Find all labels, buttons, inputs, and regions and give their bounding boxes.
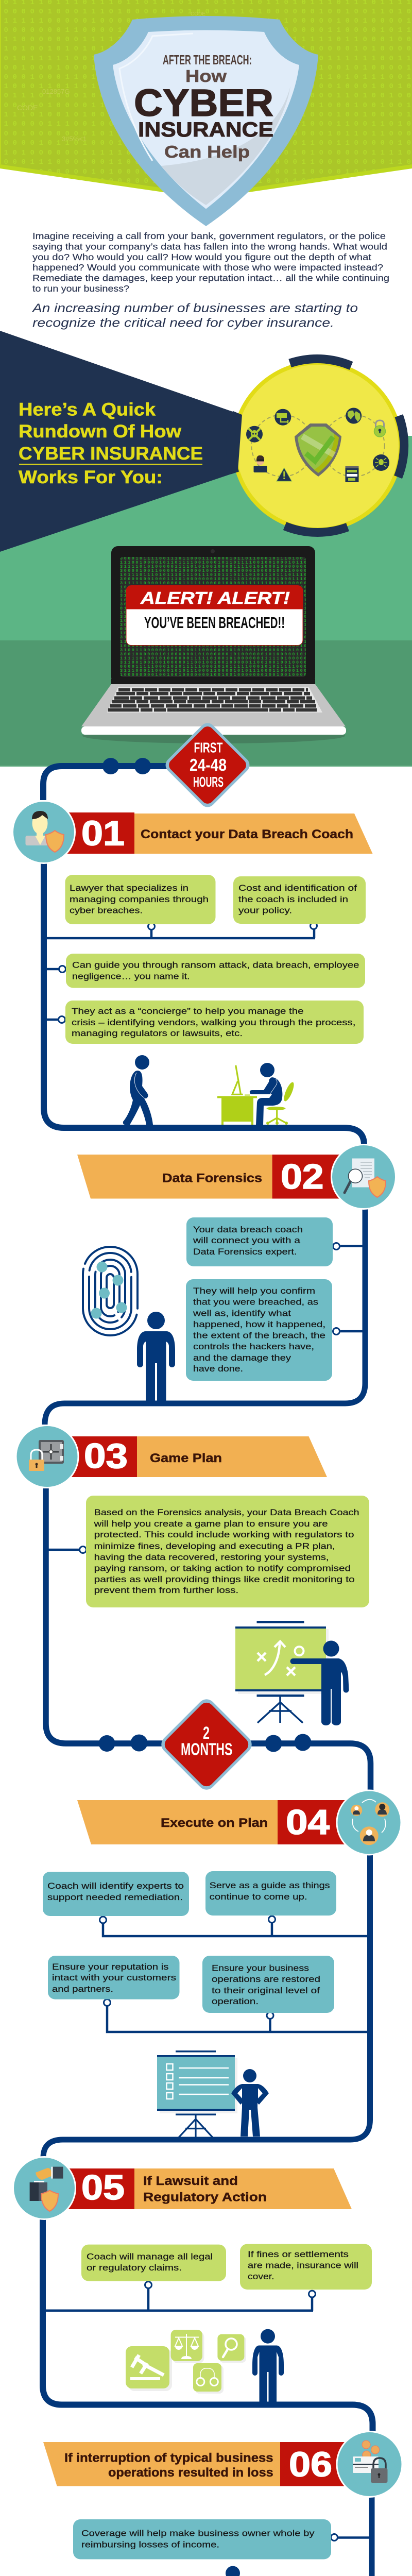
callout: game plan: will help you create a game plan to ensure you are (93, 1519, 328, 1529)
connector lines 03 (46, 1547, 87, 1553)
rundown heading: Works For You: (19, 467, 163, 487)
banner 01: 01 (81, 814, 125, 853)
callout: fines: cover. (248, 2272, 274, 2281)
timeline: step 03 path (46, 1488, 371, 1790)
italic statement (31, 301, 358, 330)
callout: experts: Coach will identify experts to (47, 1882, 184, 1891)
callout: game plan: minimize fines, developing and executing a PR plan, (94, 1541, 335, 1551)
icon: team cycle (336, 1790, 402, 1856)
timeline: step 05 path (43, 2218, 373, 2433)
section 04: execute on plan (43, 1790, 402, 2158)
header background: green binary field: 101001010101000001010010010010101010000010100000 (4, 45, 412, 53)
binary screen: 300100000010100000010100000010100000010100000101 (120, 652, 308, 657)
binary screen: 011010010110100101101001011010010110100101101001 (120, 606, 308, 611)
italic statement: An increasing number of businesses are starting to (31, 301, 358, 315)
header background: green binary field: 111010010100100010100100101001001010001001000010 (4, 111, 412, 119)
milestone connector dots: two months (99, 1734, 311, 1752)
binary screen: 310111001101011100110101110011010111001101011100 (120, 589, 308, 594)
binary screen: 300001001100000100000100110001000010000100110000 (120, 568, 308, 573)
callout: coverage: reimbursing losses of income. (81, 2539, 219, 2549)
connector lines 02 (333, 1243, 364, 1334)
badge: first 24-48 hours: 24-48 (190, 755, 227, 774)
icon: padlock (374, 420, 385, 437)
badge: 2 months (158, 1696, 255, 1793)
intro paragraph: saying that your company’s data has fallen into the wrong hands. What would (32, 241, 387, 251)
intro paragraph: Imagine receiving a call from your bank, government regulators, or the police (32, 231, 386, 241)
callout: guide: negligence… you name it. (72, 972, 190, 981)
banner 06: 06 (289, 2445, 332, 2484)
timeline: step 02 path (45, 1208, 365, 1425)
banner 04: 04 (286, 1803, 330, 1842)
section 01: data breach coach (12, 800, 373, 1125)
header background: green binary field: 010111110010111110100100011101111001011111100111 (4, 55, 412, 63)
callout: lawyer: managing companies through (70, 894, 209, 904)
header background: green binary field: 110000000111110110001000100000000111110110001001 (4, 36, 412, 44)
rundown heading: Here’s A Quick (19, 400, 156, 419)
icon tile: gavel (126, 2346, 172, 2391)
callout: reputation: intact with your customers (52, 1973, 176, 1982)
icon: card with padlock and coins (336, 2431, 403, 2498)
callout: confirm: happened, how it happened, (193, 1320, 325, 1329)
callout: reputation: and partners. (52, 1985, 113, 1994)
callout: confirm: the extent of the breach, the (193, 1331, 325, 1341)
badge: first 24-48 hours: FIRST (194, 740, 222, 755)
callout: game plan (86, 1496, 369, 1607)
callout: confirm: that you were breached, as (193, 1298, 318, 1307)
banner 06: operations resulted in loss (108, 2466, 273, 2480)
timeline: final path (174, 2497, 372, 2576)
binary screen: 300100010000100010000100010000100010000100010001 (120, 602, 308, 607)
header background: green binary field: CODE (17, 104, 38, 112)
binary screen: 111110100101000000111110100101000000111110100000 (120, 656, 308, 661)
callout: claims (81, 2245, 226, 2281)
laptop (81, 546, 346, 743)
banner 03: 03 (84, 1436, 128, 1476)
banner 02 (77, 1155, 342, 1198)
header background: green binary field: 012857G (42, 88, 70, 95)
binary screen: 011000110001100011000110001100011000110001100011 (120, 626, 308, 632)
binary screen: 310010010001001000100100010010001001000100100010 (120, 635, 308, 640)
banner 04: Execute on Plan (161, 1816, 268, 1830)
banner 03 (67, 1436, 327, 1477)
binary screen: 111001000010110111100100010110111100100100010110 (120, 560, 308, 565)
binary screen: 000011111000101011111000101011111000101011111000 (120, 664, 308, 669)
icon: ballot box and hand (12, 2156, 76, 2220)
callout: guide: Can guide you through ransom attack, data breach, employee (72, 960, 359, 970)
figure: person with checklist board (157, 2050, 269, 2140)
header background: green binary field: 101000000111110010010010001000000101000000111100 (4, 149, 412, 157)
icon: masked hacker (253, 455, 267, 472)
banner 01: Contact your Data Breach Coach (141, 827, 353, 841)
callout: experts: support needed remediation. (47, 1893, 183, 1902)
yellow threat circle (232, 361, 403, 532)
timeline: step 01 path (44, 863, 364, 1145)
callout: operations: operation. (212, 1997, 259, 2006)
callout: guide (66, 954, 365, 988)
title text: INSURANCE (138, 118, 273, 141)
title text: CYBER (134, 81, 273, 124)
icon: warning triangle (277, 468, 291, 481)
icon: security camera (274, 409, 291, 426)
badge: first 24-48 hours (162, 720, 253, 810)
callout: cost: the coach is included in (238, 894, 348, 904)
binary screen: 310001100100011001000110010001100100011001000110 (120, 614, 308, 619)
intro paragraph: you do? Who would you call? How would you figure out the depth of what (32, 252, 371, 262)
rundown heading: Rundown Of How (19, 421, 182, 442)
banner 05: 05 (81, 2168, 125, 2207)
callout: game plan: prevent them from further loss. (94, 1586, 238, 1595)
header background: green binary field: 111110000010000110100010111101111000001001000010 (4, 17, 412, 25)
header background: green binary field: 000010110100010100010110101000010011001100000100 (4, 139, 412, 147)
banner 05: If Lawsuit and (143, 2174, 238, 2188)
callout: fines: If fines or settlements (248, 2250, 349, 2259)
icon: globe (346, 408, 362, 423)
header background: green binary field: 000001000011000100010010010011000100100010010010 (4, 101, 412, 110)
badge: 2 months: MONTHS (181, 1740, 233, 1759)
alert dialog: ALERT! ALERT! (140, 588, 290, 607)
header background: green binary field: 3#5%<1 (62, 135, 87, 143)
binary screen: 311110101000001111010100100001111010100010000000 (120, 564, 308, 569)
callout: coverage (73, 2519, 331, 2560)
section 03: game plan (15, 1425, 371, 1790)
callout: game plan: Based on the Forensics analysis, your Data Breach Coach (94, 1508, 359, 1517)
section 02: data forensics (45, 1144, 397, 1425)
banner 03: Game Plan (150, 1451, 222, 1465)
callout: concierge (65, 1001, 364, 1044)
callout: operations: Ensure your business (212, 1964, 309, 1973)
figure: presenter at play board (235, 1621, 349, 1725)
italic statement: recognize the critical need for cyber insurance. (32, 316, 334, 330)
banner 06 (43, 2442, 347, 2486)
callout: confirm: and the damage they (193, 1353, 291, 1363)
icon tile: scales (171, 2330, 204, 2363)
alert dialog: YOU’VE BEEN BREACHED!! (144, 614, 285, 632)
callout: experts (43, 1872, 189, 1916)
callout: game plan: protected. This could include working with regulators to (94, 1530, 354, 1539)
header background: green binary field: 000100011010110101110010000100011010110101110011 (4, 73, 412, 81)
title text: AFTER THE BREACH: (163, 52, 252, 67)
rundown heading: CYBER INSURANCE (19, 444, 203, 464)
binary screen: 310011000000101010011000000101010011000000101011 (120, 648, 308, 653)
icon: document inspection (331, 1144, 397, 1210)
icon: coach with shield (12, 800, 76, 864)
binary screen: 100000100010000010001000001000100000100010000010 (120, 643, 308, 649)
title text: How (185, 66, 227, 86)
icon: skull and crossbones (246, 426, 263, 443)
binary screen: 110110111011011101101110110111011011101101110111 (120, 639, 308, 645)
callout: operations (202, 1956, 334, 2013)
callout: game plan: paying ransom, or taking action to notify compromised (94, 1564, 351, 1573)
callout: game plan: having the data recovered, restoring your systems, (94, 1553, 329, 1562)
callout: connect: will connect you with a (193, 1236, 301, 1245)
callout: operations: operations are restored (212, 1975, 320, 1984)
callout: fines: are made, insurance will (248, 2261, 358, 2270)
intro paragraph: happened? Would you communicate with those who were impacted instead? (32, 262, 383, 273)
header background: green binary field: CODE (191, 11, 205, 17)
connector line 06 (331, 2534, 372, 2541)
figure: walking person (123, 1055, 153, 1125)
figure: person at desk (217, 1063, 296, 1125)
title text (134, 52, 273, 161)
callout: cost: your policy. (238, 906, 292, 915)
callout: coverage: Coverage will help make business owner whole by (81, 2529, 315, 2538)
connector lines 01 (44, 922, 317, 1023)
heading panel: navy wedge (0, 331, 404, 552)
icon tile: magnifier (217, 2334, 246, 2363)
figure: standing person (137, 1312, 175, 1401)
callout: confirm: They will help you confirm (193, 1286, 315, 1296)
callout: confirm: have done. (193, 1364, 243, 1374)
header background: green binary field: 001000000010110010001000010110010000010110110001 (4, 130, 412, 138)
banner 02: 02 (281, 1157, 324, 1196)
binary screen: 300110011001100110011001100110011001100110011001 (120, 622, 308, 628)
icon: safe and padlock (15, 1425, 79, 1488)
banner 05: Regulatory Action (143, 2191, 267, 2204)
binary screen: 300000001000111010000000100011101000000010001110 (120, 577, 308, 582)
callout: fines (240, 2244, 372, 2290)
callout: confirm: controls the hackers have, (193, 1342, 314, 1351)
binary screen (120, 556, 308, 677)
binary screen: 311001001001000001100100100100000110010010010000 (120, 660, 308, 665)
title shield (94, 16, 318, 226)
header background: green binary field: 100001110010011010001110010100010110001100110101 (4, 120, 412, 128)
header background: green binary field: 010000000010100000000100100010000110000101000101 (4, 168, 412, 176)
banner 02: Data Forensics (162, 1171, 262, 1185)
callout: cost (233, 876, 366, 924)
binary screen: 100101001010010100101001010010100101001010010101 (120, 631, 308, 636)
header background: green binary field: 000100100010000001000100010001000100010010001000 (4, 177, 412, 185)
binary screen: 100000000100100100000001001001000000010010010000 (120, 672, 308, 677)
figure: person holding money bags (191, 2566, 273, 2576)
callout: connect: Your data breach coach (193, 1225, 303, 1234)
binary screen: 101010110101011010101101010110101011010101101011 (120, 618, 308, 623)
callout: concierge: managing regulators or lawsuits, etc. (72, 1028, 243, 1038)
header background: green binary field: 001000100010100010001010010101010000100101000010 (4, 64, 412, 72)
timeline: top connector to step 01 (43, 758, 175, 800)
callout: concierge: crisis – identifying vendors, walking you through the process, (72, 1018, 355, 1027)
callout: reputation: Ensure your reputation is (52, 1962, 169, 1972)
callout: confirm: well as, identify what (193, 1309, 291, 1318)
callout: guide: continue to come up. (210, 1892, 307, 1902)
section 05: lawsuit and regulatory action (12, 2156, 373, 2433)
icon: login window (345, 466, 358, 482)
callout: guide: Serve as a guide as things (210, 1881, 330, 1890)
binary screen: 310000100110000100110000100110000100110000100110 (120, 593, 308, 598)
intro paragraph (32, 231, 389, 294)
connector lines 05 (43, 2281, 315, 2311)
callout: lawyer: Lawyer that specializes in (70, 883, 188, 893)
callout: connect: Data Forensics expert. (193, 1247, 297, 1257)
callout: lawyer (65, 875, 215, 924)
callout: guide (205, 1871, 336, 1916)
callout: concierge: They act as a “concierge” to help you manage the (72, 1006, 304, 1016)
keyboard (107, 687, 322, 713)
intro paragraph: to run your business? (32, 283, 129, 294)
intro paragraph: Remediate the damages, keep your reputation intact… all the while continuing (32, 273, 389, 283)
rundown heading (19, 400, 203, 487)
callout: game plan: parties as well providing things like credit monitoring to (94, 1575, 355, 1584)
header background: green binary field: 000001000111010000000100011101000000100100110101 (4, 8, 412, 16)
section 06: business interruption (43, 2431, 403, 2576)
banner 05 (64, 2168, 352, 2209)
figure: person facing icons (252, 2329, 284, 2402)
header background: green binary field: 000111000000110000110001100110000011000000001100 (4, 158, 412, 166)
header background: green binary field: 100011011011000011000100101101110110001000100100 (4, 82, 412, 91)
callout: claims: Coach will manage all legal (87, 2252, 213, 2262)
title text: Can Help (164, 142, 250, 161)
banner 01 (64, 812, 373, 854)
callout: lawyer: cyber breaches. (70, 906, 143, 915)
header background: green binary field: 000000011000010110100000110001000000011000010110 (4, 26, 412, 35)
header background: green binary field (0, 0, 412, 198)
connector lines 04 (100, 1916, 370, 2032)
icon: bug (373, 454, 389, 471)
icon: fingerprint (83, 1247, 138, 1335)
binary screen: 311100011000010101110001100001010111000110000100 (120, 668, 308, 673)
banner 06: If interruption of typical business (64, 2451, 273, 2465)
alert dialog (126, 585, 303, 645)
badge: 2 months: 2 (203, 1723, 210, 1743)
dashed orbits (251, 415, 385, 477)
banner 04 (77, 1800, 347, 1844)
timeline: step 04 path (43, 1855, 370, 2158)
callout: connect (186, 1217, 333, 1266)
callout: operations: to their original level of (212, 1986, 320, 1995)
callout: confirm (186, 1279, 332, 1381)
badge: first 24-48 hours: HOURS (193, 774, 224, 790)
binary screen: 311111000010000011111100001000001111110000100000 (120, 581, 308, 586)
binary screen: 100100110010011001001100100110010011001001100100 (120, 585, 308, 590)
callout: reputation (48, 1956, 179, 1999)
binary screen: 100111010011101001110100111010011101001110100111 (120, 610, 308, 615)
callout: claims: or regulatory claims. (87, 2263, 182, 2273)
green backdrop bands (0, 436, 412, 767)
icon: central shield with check (295, 423, 341, 477)
callout: cost: Cost and identification of (238, 883, 357, 893)
icon tile: handcuffs (193, 2363, 224, 2394)
circle frame arcs (230, 359, 404, 532)
header background: green binary field: 011101000100001100010100010101000100001101001000 (4, 92, 412, 100)
binary screen: 000010111100111011000111000010110110001011101001 (120, 556, 308, 561)
binary screen: 101101011010110101101011010110101101011010110101 (120, 598, 308, 603)
binary screen: 101110111010111011101110101110111010111011101110 (120, 572, 308, 578)
